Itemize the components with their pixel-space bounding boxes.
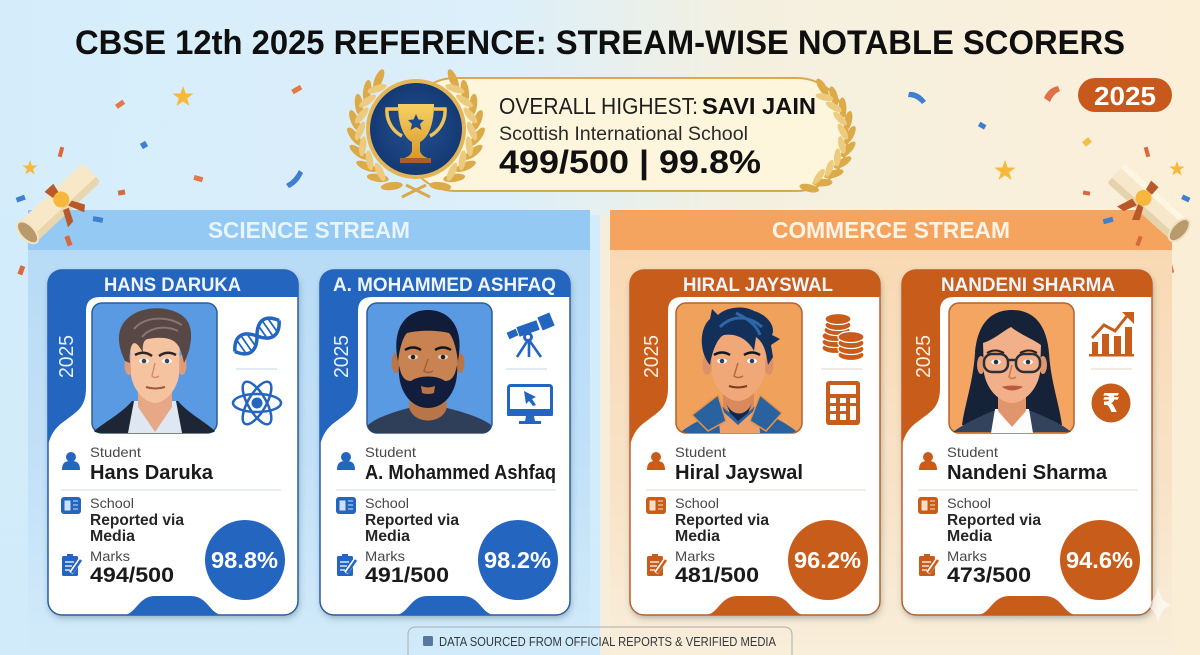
card name heading: HIRAL JAYSWAL [683,275,833,296]
marks label and value: Marks [675,548,715,564]
student label and name: Hiral Jayswal [675,462,803,484]
school label and value: School [365,495,409,511]
banner plate [405,78,847,191]
school label and value: Media [365,528,410,545]
marks label and value: 491/500 [365,564,449,587]
card band and sidebar [320,270,570,445]
student label and name: A. Mohammed Ashfaq [365,462,556,484]
bottom tab [395,596,495,615]
sparkle [1144,586,1172,624]
year label: 2025 [641,335,663,378]
small confetti over headers [64,216,1143,246]
title: CBSE 12th 2025 REFERENCE: STREAM-WISE NOTABLE SCORERS [75,24,1125,62]
icon: rupee coin [1092,384,1130,422]
icon: school book [336,497,356,514]
icon: marks clipboard [647,554,666,576]
icon: marks clipboard [62,554,81,576]
marks label and value: Marks [90,548,130,564]
commerce stream heading: COMMERCE STREAM [772,217,1010,243]
school label and value [90,495,184,545]
commerce stream heading bar [610,210,1172,250]
student label and name: Student [947,444,998,460]
school label and value: Media [947,528,992,545]
marks label and value: 481/500 [675,564,759,587]
card: Nandeni Sharma [902,270,1152,615]
laurel wreath around medal [345,68,487,197]
icon: left diploma scroll [10,159,108,255]
divider [61,489,281,491]
divider [821,368,862,370]
icon: telescope [508,319,552,357]
marks label and value: Marks [365,548,405,564]
portrait [92,303,217,433]
school label and value [675,495,769,545]
card band and sidebar [630,270,880,445]
panel: commerce stream [610,210,1172,655]
card band and sidebar [48,270,298,445]
school label and value: Media [675,528,720,545]
banner text: 499/500 | 99.8% [499,144,761,180]
student label and name [365,444,556,484]
school label and value: School [675,495,719,511]
icon: calculator [826,381,860,425]
portrait [676,303,802,433]
percentage circle [205,520,285,600]
school label and value: Media [90,528,135,545]
divider [646,489,866,491]
student label and name [90,444,214,484]
marks label and value [675,548,759,587]
school label and value: School [947,495,991,511]
portrait [367,303,492,433]
percentage circle: 94.6% [1066,547,1133,573]
marks label and value [947,548,1031,587]
student label and name: Student [675,444,726,460]
footer source note: DATA SOURCED FROM OFFICIAL REPORTS & VERIFIED MEDIA [439,634,776,649]
year badge [1078,78,1172,112]
icon: marks clipboard [337,554,356,576]
panel: science stream [28,210,590,655]
school label and value: Reported via [947,512,1041,529]
divider [918,489,1138,491]
student label and name [947,444,1108,484]
banner text: OVERALL HIGHEST: [499,93,698,119]
school label and value: School [90,495,134,511]
student label and name: Hans Daruka [90,462,214,484]
icon: person [919,452,937,470]
icon: trophy medal [366,79,466,179]
year badge: 2025 [1094,81,1156,111]
science stream heading bar [28,210,590,250]
bottom tab [977,596,1077,615]
icon: rupee coin: ₹ [1102,389,1120,419]
footer source note [408,627,792,655]
card: A. Mohammed Ashfaq [320,270,570,615]
icon: person [62,452,80,470]
icon: right diploma scroll [1100,160,1196,253]
science stream heading: SCIENCE STREAM [208,217,410,243]
percentage circle: 98.2% [484,547,551,573]
confetti and stars [16,85,1190,275]
divider [236,368,277,370]
percentage circle: 96.2% [794,547,861,573]
percentage circle [1060,520,1140,600]
bottom tab [705,596,805,615]
card: Hans Daruka [48,270,298,615]
banner text [499,93,816,180]
bottom tab [123,596,223,615]
card band and sidebar [902,270,1152,445]
divider [1091,368,1132,370]
banner text: Scottish International School [499,124,748,145]
icon: atom [233,378,281,428]
marks label and value: Marks [947,548,987,564]
card: Hiral Jayswal [630,270,880,615]
year label: 2025 [331,335,353,378]
laurel at banner right end [799,77,858,194]
marks label and value: 494/500 [90,564,174,587]
year label: 2025 [913,335,935,378]
marks label and value: 473/500 [947,564,1031,587]
divider [506,368,547,370]
student label and name: Student [90,444,141,460]
icon: DNA [229,313,285,359]
school label and value: Reported via [90,512,184,529]
icon: computer monitor [507,386,553,424]
student label and name: Nandeni Sharma [947,462,1108,484]
portrait [949,303,1074,433]
icon: coins [822,314,864,360]
year label: 2025 [56,335,78,378]
student label and name [675,444,803,484]
card name heading: HANS DARUKA [104,275,241,296]
icon: school book [918,497,938,514]
student label and name: Student [365,444,416,460]
marks label and value [365,548,449,587]
icon: person [647,452,665,470]
school label and value [365,495,459,545]
marks label and value [90,548,174,587]
school label and value: Reported via [365,512,459,529]
percentage circle [478,520,558,600]
icon: person [337,452,355,470]
percentage circle [788,520,868,600]
percentage circle: 98.8% [211,547,278,573]
banner text: SAVI JAIN [702,93,816,119]
card name heading: NANDENI SHARMA [941,275,1115,296]
school label and value: Reported via [675,512,769,529]
card name heading: A. MOHAMMED ASHFAQ [333,275,556,296]
banner: overall highest [345,68,858,197]
icon: school book [646,497,666,514]
icon: growth chart [1089,312,1134,356]
icon: marks clipboard [919,554,938,576]
icon: school book [61,497,81,514]
school label and value [947,495,1041,545]
divider [336,489,556,491]
